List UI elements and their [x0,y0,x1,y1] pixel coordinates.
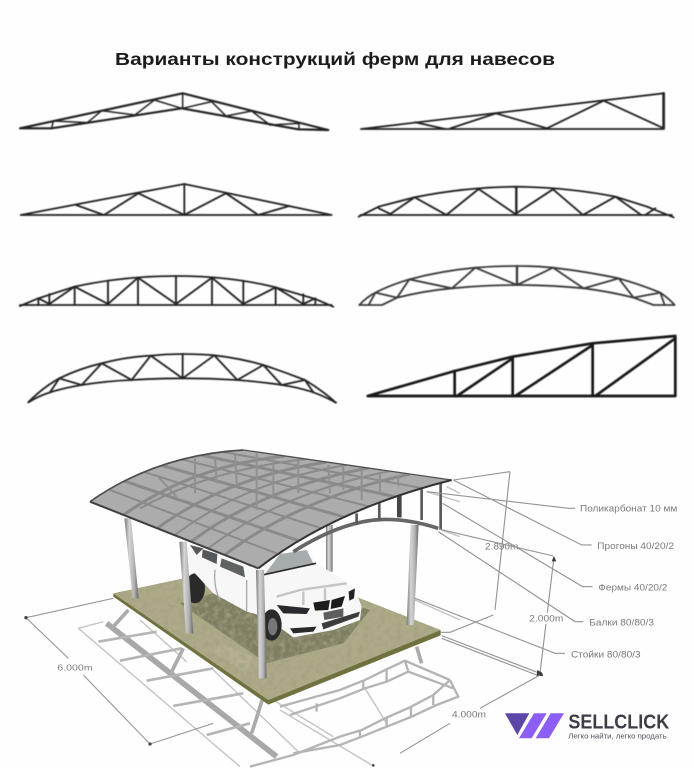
callout: polycarbonate [427,492,677,514]
truss 2: gable with flat bottom chord [21,184,332,215]
dimension: 2.000m [440,529,564,676]
logo: SELLCLICK [505,711,669,740]
callout: posts: Стойки 80/80/3 [571,649,641,659]
callout: purlins [453,480,674,551]
callout: polycarbonate: Поликарбонат 10 мм [580,504,677,514]
back post [326,525,333,572]
dimension: 2.890m: 2.890m [485,542,518,552]
callout: beams: Балки 80/80/3 [589,618,654,628]
truss 1: gable with parallel chords [20,93,328,130]
carport illustration [90,450,460,705]
dimension: 2.890m [440,472,518,632]
callouts and dimensions [400,472,677,753]
truss 7: double arch on flat ends [359,266,675,305]
end truss frame [293,482,441,552]
truss 5: arched with vertical posts [20,276,333,307]
callout: posts [415,598,641,659]
callout: trusses: Фермы 40/20/2 [598,583,667,593]
shadow lines behind carport [415,487,460,620]
callout: purlins: Прогоны 40/20/2 [597,541,674,551]
truss 6: double arch [28,354,336,403]
ground shadow of structure [78,610,458,767]
icon: logo mark [505,713,564,738]
dimension: 4.000m [400,675,540,753]
concrete slab [113,561,441,705]
dimension: 4.000m: 4.000m [452,710,486,720]
dimension: 6.000m [24,598,375,767]
panel: truss variants [20,93,675,403]
callout: trusses [443,503,667,593]
posts [124,518,419,678]
polycarbonate roof [90,450,452,568]
truss 3: single pitch [361,93,664,129]
car [179,545,362,641]
dimension: 6.000m: 6.000m [57,663,93,673]
dimension: 2.000m: 2.000m [529,614,563,624]
logo tagline: Легко найти, легко продать [568,732,667,740]
title: Варианты конструкций ферм для навесов [115,49,555,69]
truss 4: arched top chord, flat bottom chord [359,187,674,217]
callout: beams [438,532,654,628]
logo name: SELLCLICK [568,711,669,734]
truss 8: heavy single pitch [368,336,675,396]
